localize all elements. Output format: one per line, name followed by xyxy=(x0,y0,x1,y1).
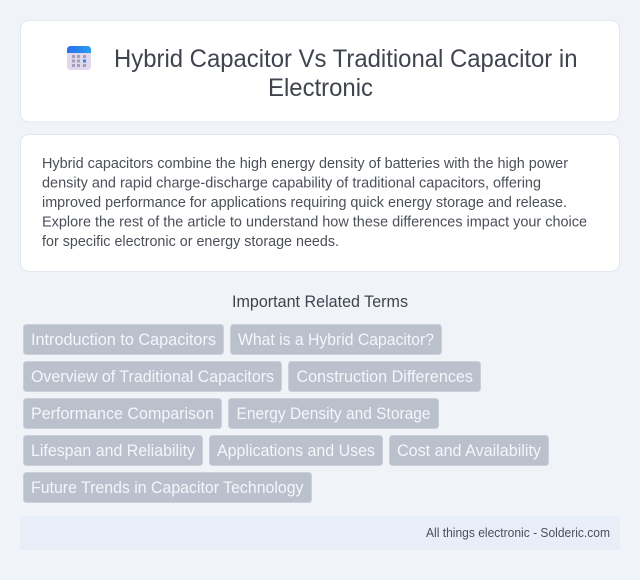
intro text panel: improved performance for applications requiring quick energy storage and release. xyxy=(42,194,567,211)
related terms heading: Important Related Terms xyxy=(232,292,408,311)
icon: calendar xyxy=(67,46,91,70)
tag: Future Trends in Capacitor Technology: Future Trends in Capacitor Technology xyxy=(31,478,304,497)
tag: Cost and Availability xyxy=(390,436,548,466)
tag: Performance Comparison xyxy=(24,398,222,428)
intro text panel xyxy=(20,134,620,272)
tag: Overview of Traditional Capacitors: Overview of Traditional Capacitors xyxy=(31,367,274,386)
tag: Performance Comparison: Performance Comparison xyxy=(31,404,214,423)
tag: Future Trends in Capacitor Technology xyxy=(24,472,312,502)
header panel xyxy=(20,20,620,122)
tag: Energy Density and Storage: Energy Density and Storage xyxy=(236,404,430,423)
tag: Lifespan and Reliability xyxy=(24,436,202,466)
title: Electronic xyxy=(268,74,373,102)
tag: Introduction to Capacitors xyxy=(24,324,224,354)
related terms tags xyxy=(24,324,548,502)
tag: What is a Hybrid Capacitor? xyxy=(230,324,442,354)
intro text panel: density and rapid charge-discharge capability of traditional capacitors, offering xyxy=(42,174,541,192)
tag: Construction Differences xyxy=(288,362,480,392)
tag: Construction Differences: Construction Differences xyxy=(296,367,473,386)
tag: Applications and Uses: Applications and Uses xyxy=(217,441,375,460)
tag: Introduction to Capacitors: Introduction to Capacitors xyxy=(31,330,216,349)
intro text panel: for specific electronic or energy storage needs. xyxy=(42,233,339,250)
tag: Cost and Availability: Cost and Availability xyxy=(397,441,542,460)
footer credit: All things electronic - Solderic.com xyxy=(426,526,610,540)
tag: Lifespan and Reliability: Lifespan and Reliability xyxy=(31,441,196,460)
tag: What is a Hybrid Capacitor?: What is a Hybrid Capacitor? xyxy=(238,330,434,349)
title xyxy=(114,45,578,102)
intro text panel: Hybrid capacitors combine the high energy density of batteries with the high power xyxy=(42,155,568,172)
intro text panel: Explore the rest of the article to understand how these differences impact your choice xyxy=(42,214,587,230)
tag: Overview of Traditional Capacitors xyxy=(24,362,282,392)
title: Hybrid Capacitor Vs Traditional Capacitor in xyxy=(114,45,578,73)
tag: Applications and Uses xyxy=(210,436,382,466)
footer bar xyxy=(20,516,620,550)
tag: Energy Density and Storage xyxy=(228,398,438,428)
